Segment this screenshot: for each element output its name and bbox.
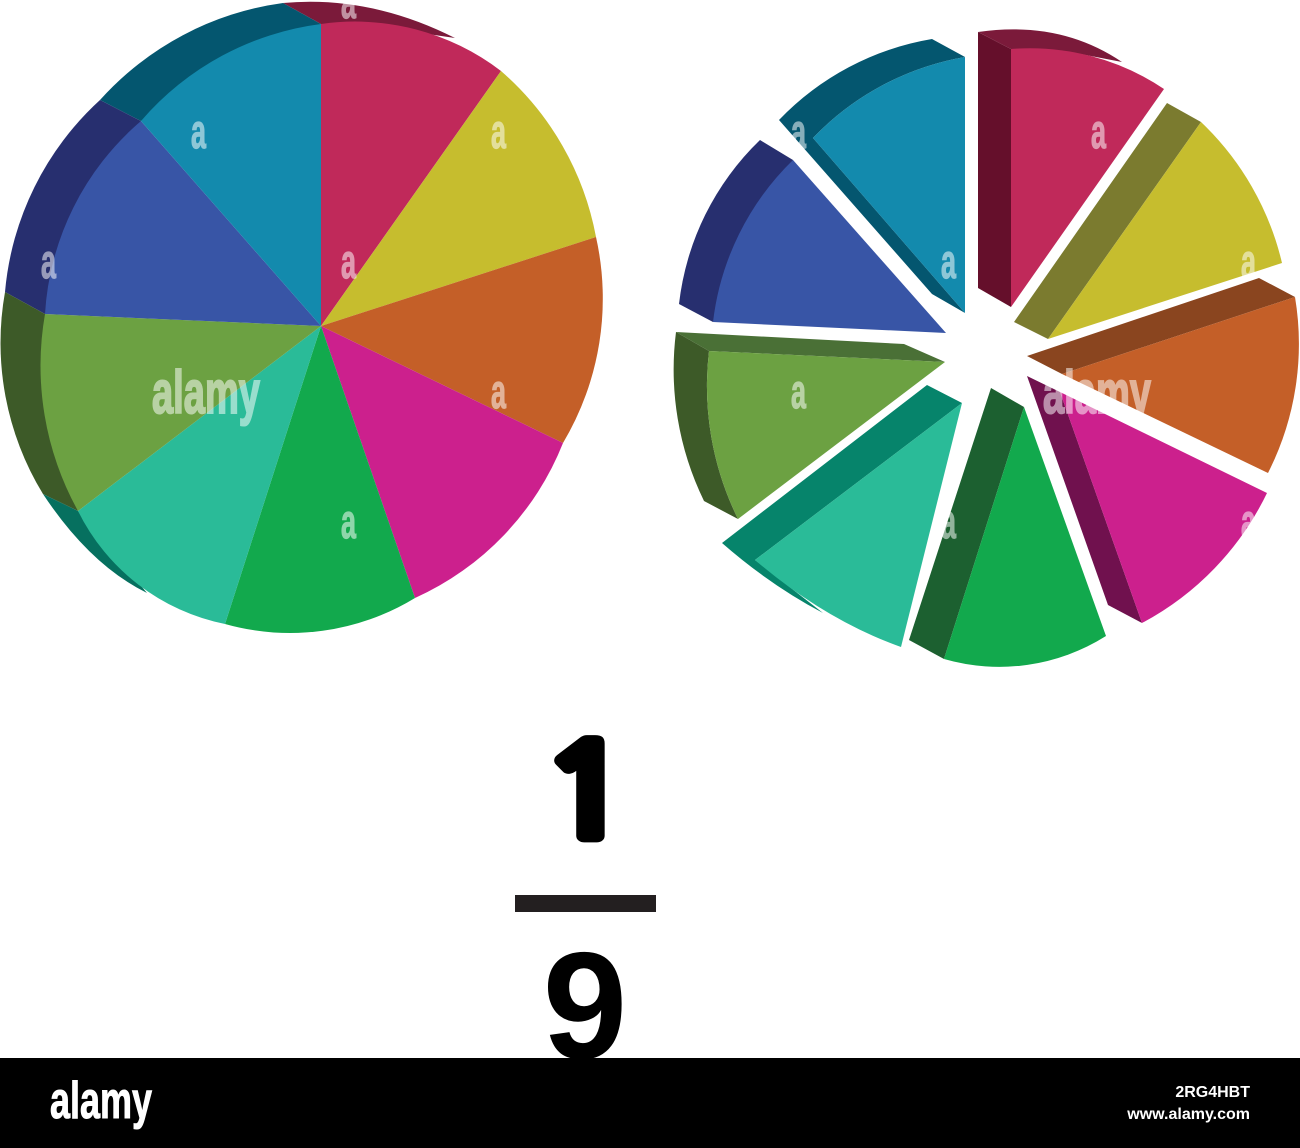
exploded slice: magenta	[1027, 376, 1267, 623]
image id: 2RG4HBT	[1175, 1084, 1250, 1101]
footer bar	[0, 1058, 1300, 1148]
watermark letters: a	[1241, 496, 1256, 549]
exploded slice: cyan	[779, 39, 965, 313]
watermark letters: a	[1241, 236, 1256, 289]
website: www.alamy.com	[1126, 1106, 1250, 1123]
slice: green	[225, 326, 415, 633]
fraction denominator: 9: 9	[543, 921, 627, 1091]
watermark letters: a	[341, 496, 356, 549]
pie side: dark red rim	[283, 2, 455, 38]
exploded slice: yellow	[1014, 103, 1282, 339]
watermark letters: a	[941, 496, 956, 549]
watermark letters: a	[491, 106, 506, 159]
exploded slice: olive green	[674, 332, 945, 519]
fraction numerator: 1: 1	[540, 730, 634, 857]
watermark letters: a	[791, 106, 806, 159]
watermark letters: a	[1091, 106, 1106, 159]
pie side: dark green rim	[1, 292, 78, 511]
exploded slice: teal	[722, 385, 962, 647]
exploded slice: red	[978, 29, 1164, 307]
fraction bar	[515, 895, 656, 912]
watermark letters: a	[491, 366, 506, 419]
slice: yellow	[321, 71, 596, 326]
slice: teal	[78, 326, 321, 624]
watermark letters	[41, 0, 1256, 549]
slice: magenta	[321, 326, 563, 598]
exploded slice: blue	[679, 140, 946, 333]
slice: olive green	[41, 314, 321, 511]
watermark letters: a	[41, 236, 56, 289]
slice: cyan	[141, 24, 321, 326]
watermark letters: a	[341, 236, 356, 289]
watermark letters: a	[791, 366, 806, 419]
slice: red	[321, 22, 501, 326]
exploded pie chart: nine separated slices	[674, 29, 1299, 667]
watermark letters: a	[191, 106, 206, 159]
pie side: dark blue rim	[5, 100, 141, 314]
slice: blue	[45, 121, 321, 326]
slice: orange	[321, 237, 603, 443]
pie side: dark cyan rim	[100, 3, 321, 121]
watermark: alamy on right pie: alamy	[1043, 359, 1151, 426]
pie chart: whole circle divided into nine	[1, 2, 603, 633]
exploded slice: orange	[1027, 278, 1299, 473]
watermark letters: a	[941, 236, 956, 289]
pie side: dark teal rim	[43, 494, 147, 593]
exploded slice: green	[909, 388, 1106, 667]
footer logo: alamy: alamy	[50, 1072, 152, 1130]
watermark: alamy on left pie: alamy	[152, 359, 260, 426]
